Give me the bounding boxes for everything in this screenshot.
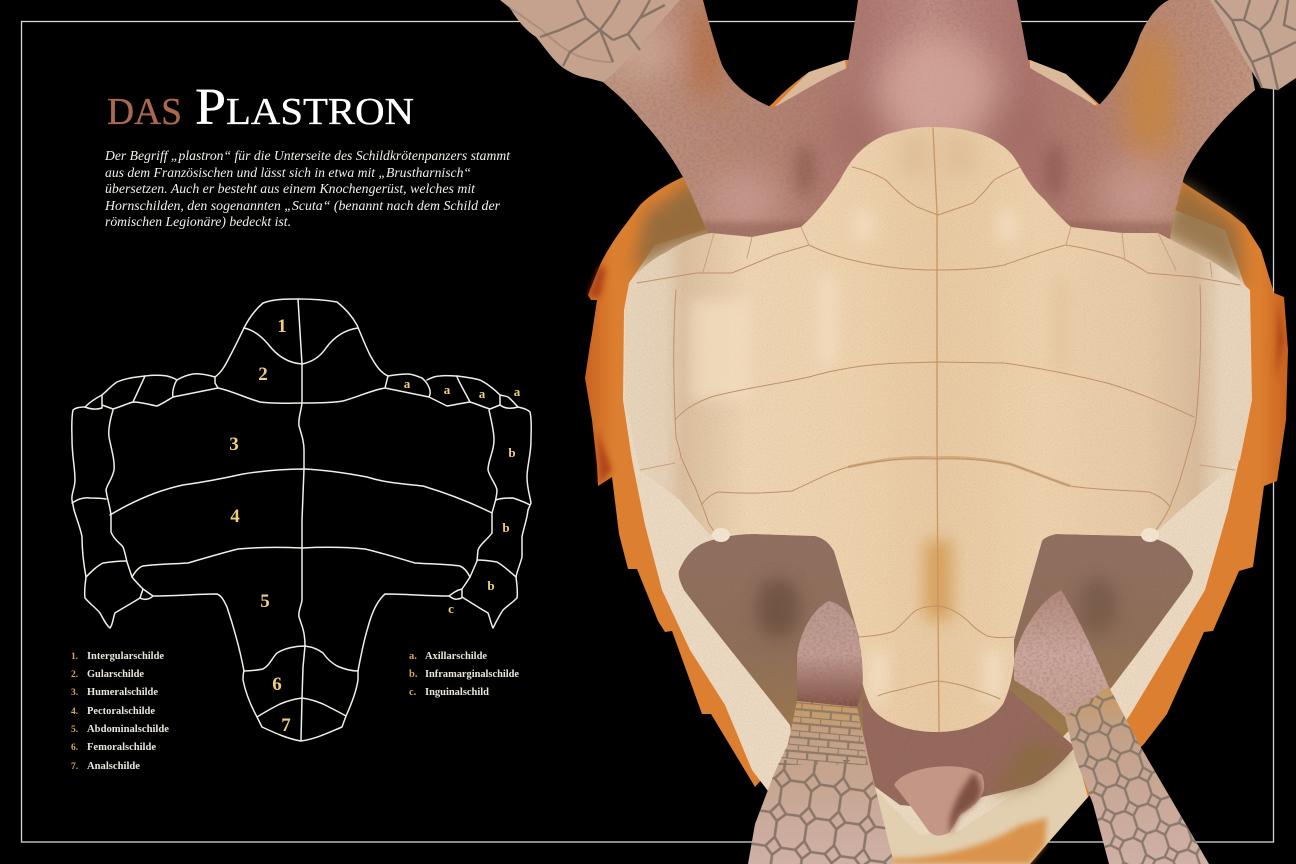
- legend: lettered scutes: b.: [409, 669, 418, 680]
- legend: lettered scutes: c.: [409, 687, 417, 698]
- scale pattern: [1065, 687, 1209, 864]
- scute numbers: 7: [281, 715, 291, 736]
- legend: lettered scutes: a.: [409, 651, 417, 662]
- right hind leg: [1014, 590, 1209, 864]
- intro text block: Hornschilden, den sogenannten „Scuta“ (benannt nach dem Schild der: [104, 198, 501, 214]
- legend: numbered scutes: Intergularschilde: [87, 650, 164, 662]
- olive shading: [990, 740, 1072, 795]
- scute numbers: 1: [277, 316, 287, 337]
- scute letters: c: [448, 601, 454, 616]
- scute letters: b: [487, 578, 495, 593]
- shaded brown band at shoulder: [632, 178, 725, 275]
- orange centre stripe: [924, 540, 952, 620]
- scute numbers: 4: [230, 506, 240, 527]
- legend: lettered scutes: Inframarginalschilde: [425, 668, 519, 680]
- flipper scale lines: [1215, 0, 1296, 90]
- intro text block: Der Begriff „plastron“ für die Unterseite des Schildkrötenpanzers stammt: [104, 148, 511, 163]
- flipper lobes: [510, 8, 613, 62]
- scute numbers: 6: [272, 674, 282, 695]
- title word: das: DAS: [107, 91, 182, 133]
- shell rim: orange margin: [585, 60, 1288, 864]
- flipper scale lines: [540, 0, 665, 66]
- scaly lower leg: [1065, 687, 1209, 864]
- skin silhouette: [603, 0, 1255, 240]
- legend: numbered scutes: 2.: [71, 670, 78, 680]
- central skin: [862, 690, 1075, 810]
- legend: numbered scutes: 6.: [71, 743, 78, 753]
- scute letters: [404, 376, 521, 616]
- neck and forelimb skin: [603, 0, 1255, 242]
- scute letters: a: [514, 384, 521, 399]
- central plastron: [620, 120, 1260, 740]
- hind pockets: [679, 534, 1193, 790]
- scute letters: b: [508, 445, 516, 460]
- legend: numbered scutes: Pectoralschilde: [87, 705, 155, 717]
- plastron line diagram: [72, 299, 531, 741]
- scute letters: a: [444, 382, 451, 397]
- legend: numbered scutes: Humeralschilde: [87, 686, 158, 698]
- scute numbers: 2: [258, 364, 268, 385]
- large scale pattern: [748, 760, 894, 864]
- lower orange rim: [890, 818, 1047, 864]
- thigh: [1014, 590, 1109, 717]
- scute numbers: 3: [229, 434, 239, 455]
- scute numbers: [229, 316, 291, 736]
- legend: numbered scutes: [71, 650, 169, 772]
- tail shadow: [949, 772, 981, 834]
- dark shade right: [1078, 578, 1118, 634]
- legend: numbered scutes: 5.: [71, 725, 78, 735]
- legend: lettered scutes: Inguinalschild: [425, 686, 489, 698]
- diagram outlines: [72, 299, 531, 741]
- axillary nubs: [712, 528, 1159, 542]
- legend: numbered scutes: Gularschilde: [87, 668, 144, 680]
- left pocket: [679, 534, 872, 790]
- scute numbers: 5: [260, 591, 270, 612]
- legend: lettered scutes: [409, 650, 519, 698]
- title word: Plastron: PLASTRON: [195, 79, 414, 136]
- abdominal speckled seam: [848, 457, 1070, 486]
- shaded band at right shoulder: [1160, 180, 1245, 285]
- legend: numbered scutes: Analschilde: [87, 760, 140, 772]
- scute letters: a: [404, 376, 411, 391]
- dark shade left: [756, 578, 800, 638]
- intro text block: [104, 148, 511, 230]
- legend: lettered scutes: Axillarschilde: [425, 650, 487, 662]
- scaly lower leg: [748, 701, 894, 864]
- lower cream shell: [876, 750, 1088, 864]
- left front flipper: [500, 0, 680, 82]
- legend: numbered scutes: Abdominalschilde: [87, 723, 169, 735]
- plastron main body: [620, 120, 1260, 740]
- scute letters: b: [502, 520, 510, 535]
- left hind leg: [748, 601, 894, 864]
- legend: numbered scutes: 4.: [71, 707, 78, 717]
- right pocket: [1004, 534, 1193, 760]
- plastron seams: [637, 128, 1240, 731]
- plastron light and shade: [690, 135, 1067, 700]
- turtle illustration: [500, 0, 1296, 864]
- small scale pattern: [778, 701, 868, 765]
- legend: numbered scutes: 1.: [71, 652, 78, 662]
- legend: numbered scutes: 3.: [71, 688, 78, 698]
- thigh: [797, 601, 863, 707]
- skin shading: [615, 0, 1180, 242]
- intro text block: übersetzen. Auch er besteht aus einem Knochengerüst, welches mit: [105, 181, 476, 196]
- tail: [894, 766, 984, 836]
- cream bone margin: [623, 200, 1250, 850]
- legend: numbered scutes: 7.: [71, 762, 78, 772]
- shell rim: dark red tips: [588, 265, 1284, 484]
- right front flipper: [1210, 0, 1296, 90]
- title: [107, 79, 414, 136]
- flipper pad: [1210, 0, 1296, 90]
- flipper pad: [500, 0, 680, 82]
- intro text block: römischen Legionäre) bedeckt ist.: [105, 214, 291, 230]
- top shell slivers: [775, 60, 1097, 115]
- legend: numbered scutes: Femoralschilde: [87, 741, 156, 753]
- scute letters: a: [479, 386, 486, 401]
- tail region skin: [862, 690, 1088, 864]
- intro text block: aus dem Französischen und lässt sich in etwa mit „Brustharnisch“: [105, 165, 471, 180]
